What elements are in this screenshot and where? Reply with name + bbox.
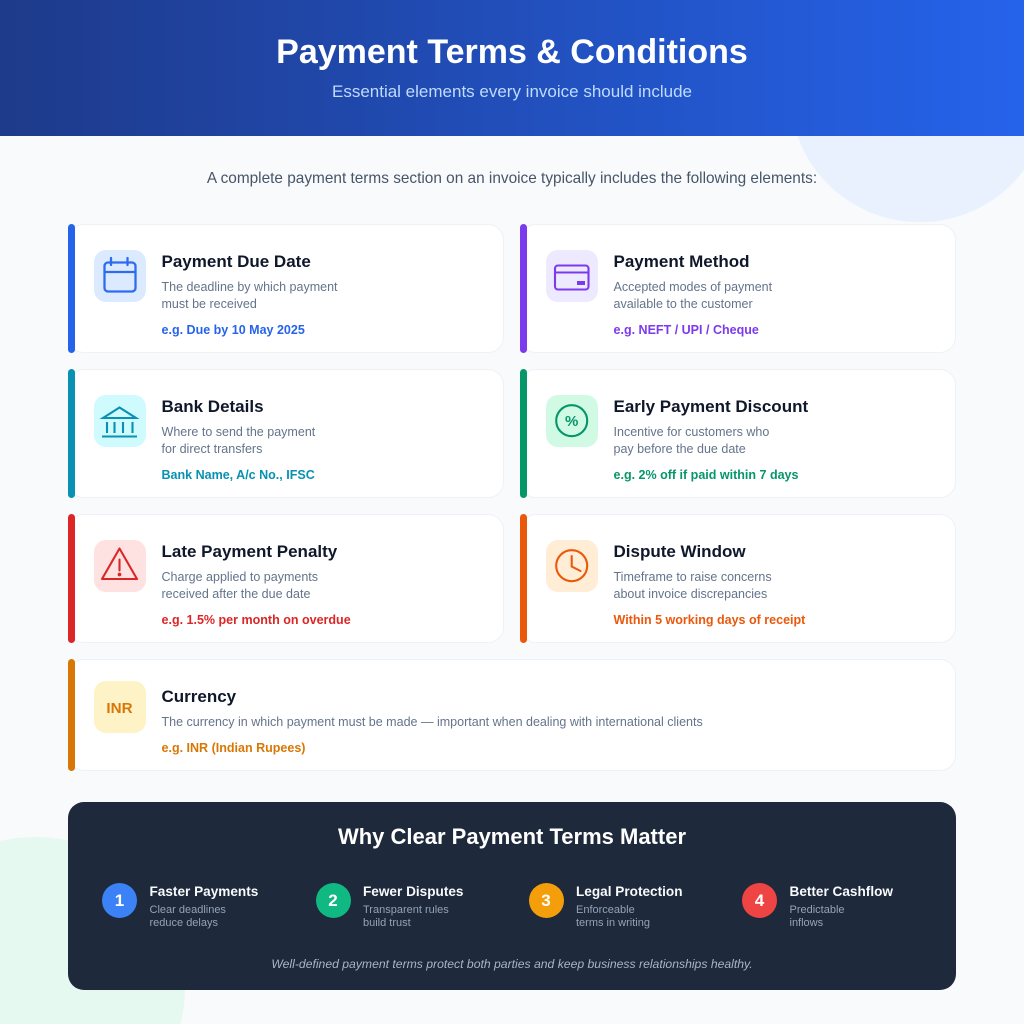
description [614, 570, 772, 601]
panel: currency [68, 659, 956, 771]
panel: early payment discount [520, 369, 956, 498]
example: e.g. NEFT / UPI / Cheque [614, 323, 759, 337]
panel: payment due date [68, 224, 504, 353]
benefit 4: 4 [755, 891, 764, 910]
heading: Payment Due Date [162, 252, 311, 271]
example: Bank Name, A/c No., IFSC [162, 468, 315, 482]
panel: why clear payment terms matter [68, 802, 956, 990]
icon: warning triangle [94, 540, 146, 592]
benefit 2: 2 [328, 891, 338, 910]
subtitle: Essential elements every invoice should include [332, 82, 692, 101]
icon: credit card [546, 250, 598, 302]
description: available to the customer [614, 297, 753, 311]
example: e.g. 1.5% per month on overdue [162, 613, 351, 627]
panel heading: Why Clear Payment Terms Matter [338, 824, 686, 849]
description: about invoice discrepancies [614, 587, 767, 601]
panel: bank details [68, 369, 504, 498]
benefit 1 [102, 883, 258, 929]
description: The currency in which payment must be made — important when dealing with international clients [162, 715, 703, 729]
heading: Early Payment Discount [614, 397, 808, 416]
benefit 3: terms in writing [576, 917, 650, 929]
icon: bank [94, 394, 146, 446]
description: received after the due date [162, 587, 310, 601]
heading: Dispute Window [614, 542, 746, 561]
example: e.g. 2% off if paid within 7 days [614, 468, 798, 482]
benefit 3: Legal Protection [576, 884, 682, 899]
description: Where to send the payment [162, 425, 315, 439]
description [162, 425, 316, 456]
heading: Payment Method [614, 252, 750, 271]
description [162, 280, 338, 311]
icon: calendar [94, 250, 146, 302]
benefit 2: Fewer Disputes [363, 884, 463, 899]
header banner [0, 0, 1024, 136]
benefit 3: Enforceable [576, 904, 635, 916]
benefit 2 [316, 883, 463, 929]
benefit 4: Better Cashflow [790, 884, 893, 899]
benefit 1: Faster Payments [150, 884, 258, 899]
benefit 3: 3 [541, 891, 551, 910]
panel: late payment penalty [68, 514, 504, 643]
description: pay before the due date [614, 442, 746, 456]
description [614, 425, 769, 456]
description: The deadline by which payment [162, 280, 338, 294]
benefit 3 [529, 883, 682, 929]
description: Accepted modes of payment [614, 280, 772, 294]
benefit 2: build trust [363, 917, 411, 929]
benefit 2: Transparent rules [363, 904, 449, 916]
description [162, 570, 318, 601]
icon: INR badge: INR [106, 700, 133, 716]
description: Incentive for customers who [614, 425, 769, 439]
closing note: Well-defined payment terms protect both parties and keep business relationships healthy. [271, 957, 753, 971]
example: Within 5 working days of receipt [614, 613, 805, 627]
title: Payment Terms & Conditions [276, 33, 748, 71]
icon: INR badge [94, 680, 146, 732]
benefit 4: inflows [790, 917, 823, 929]
panel: dispute window [520, 514, 956, 643]
icon: clock [546, 540, 598, 592]
heading: Late Payment Penalty [162, 542, 337, 561]
benefit 1: 1 [115, 891, 124, 910]
description: must be received [162, 297, 257, 311]
description: for direct transfers [162, 442, 262, 456]
description: Charge applied to payments [162, 570, 318, 584]
intro text: A complete payment terms section on an invoice typically includes the following elements: [207, 170, 817, 187]
heading: Bank Details [162, 397, 264, 416]
heading: Currency [162, 687, 236, 706]
panel: payment method [520, 224, 956, 353]
example: e.g. INR (Indian Rupees) [162, 740, 305, 754]
benefit 4 [742, 883, 893, 929]
benefit 1: Clear deadlines [150, 904, 226, 916]
description [614, 280, 772, 311]
example: e.g. Due by 10 May 2025 [162, 323, 305, 337]
benefit 1: reduce delays [150, 917, 218, 929]
icon: percent badge: % [565, 412, 578, 430]
description: Timeframe to raise concerns [614, 570, 772, 584]
icon: percent badge [546, 394, 598, 446]
benefit 4: Predictable [790, 904, 845, 916]
